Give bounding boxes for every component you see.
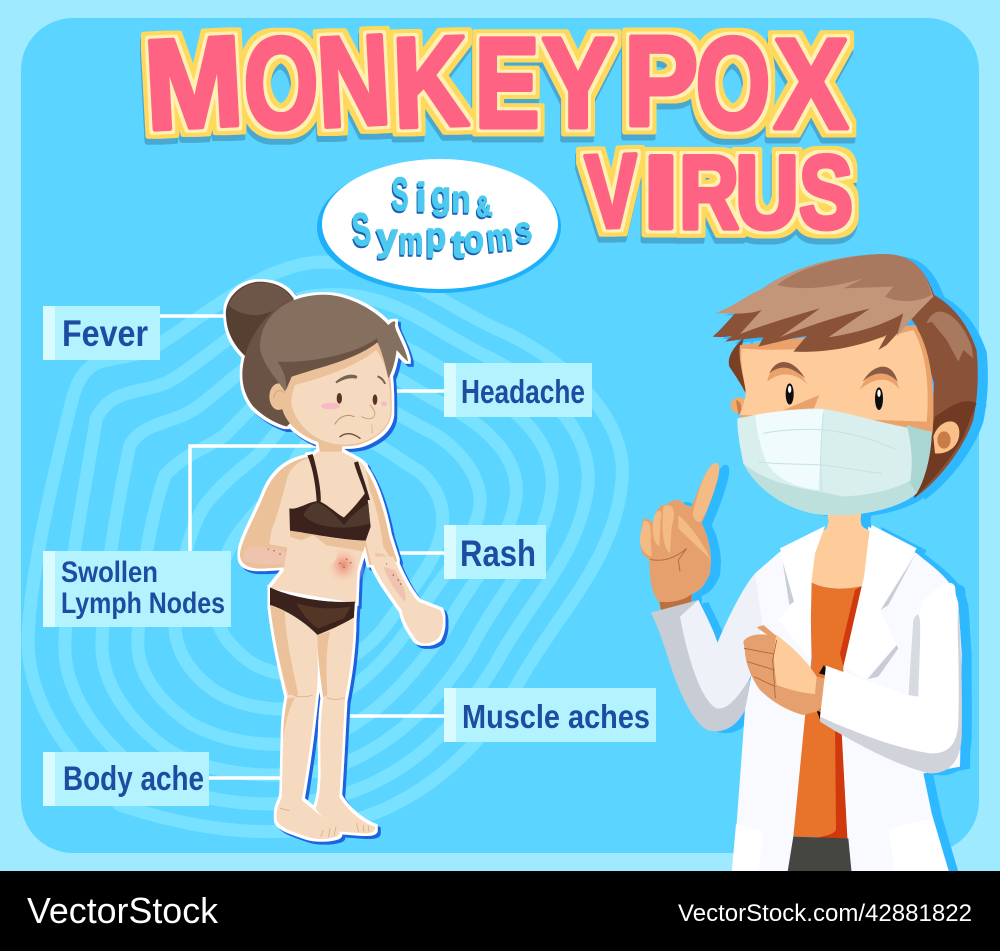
- back hair: [242, 297, 310, 427]
- badge oval: [317, 159, 561, 293]
- badge text: n: [451, 179, 471, 221]
- label: Fever: [43, 306, 160, 360]
- right arm: [359, 462, 397, 570]
- title: MONKEYPOX VIRUS: I: [643, 133, 679, 250]
- badge text: s: [512, 208, 534, 251]
- title: MONKEYPOX VIRUS: V: [584, 133, 640, 251]
- label: Swollen Lymph Nodes: Swollen: [61, 556, 158, 589]
- coat right front: [842, 527, 962, 873]
- label: Rash: Rash: [460, 533, 536, 574]
- badge text: m: [484, 215, 515, 260]
- title: MONKEYPOX VIRUS: [141, 9, 853, 251]
- label: Muscle aches: [444, 688, 656, 742]
- label: Swollen Lymph Nodes: Lymph Nodes: [61, 587, 225, 620]
- hair shade: [277, 338, 378, 390]
- nose line: [783, 395, 819, 410]
- trousers: [787, 837, 852, 873]
- left arm: [240, 456, 337, 569]
- title: MONKEYPOX VIRUS: R: [679, 134, 739, 250]
- badge: Sign & Symptoms: [317, 159, 561, 293]
- title: MONKEYPOX VIRUS: E: [475, 12, 539, 155]
- woman figure: [226, 282, 443, 839]
- badge text: &: [474, 190, 494, 224]
- footer bar: [0, 871, 1000, 951]
- label: Rash: [444, 525, 546, 579]
- watch: [817, 665, 830, 719]
- title: MONKEYPOX VIRUS: U: [735, 135, 799, 251]
- badge text: S: [350, 204, 373, 257]
- label: Fever: Fever: [62, 313, 148, 354]
- coat left front: [732, 552, 812, 873]
- title: MONKEYPOX VIRUS: X: [774, 13, 848, 156]
- badge text: g: [431, 175, 451, 217]
- nose and mouth: [335, 405, 375, 438]
- label: Headache: Headache: [461, 373, 585, 410]
- neck: [317, 433, 343, 453]
- ear: [269, 383, 288, 410]
- lab coat and shirt: [651, 517, 962, 873]
- orange shirt: [793, 582, 862, 838]
- title: MONKEYPOX VIRUS: S: [799, 134, 853, 250]
- coat pockets: [732, 818, 949, 873]
- right sleeve: [820, 583, 962, 773]
- top hair: [713, 254, 935, 352]
- front hand: [743, 625, 830, 715]
- forearm and hand: [370, 557, 443, 643]
- label: Body ache: [43, 752, 209, 806]
- badge text: o: [464, 219, 484, 261]
- title: MONKEYPOX VIRUS: N: [314, 9, 394, 155]
- rash on arm: [386, 563, 401, 585]
- face: [281, 342, 392, 446]
- footer logo text: VectorStock: [27, 890, 219, 931]
- right ear: [933, 421, 959, 454]
- chest: [810, 517, 869, 589]
- torso: [270, 452, 370, 603]
- title: MONKEYPOX VIRUS: O: [244, 11, 318, 156]
- eyes: [786, 383, 883, 410]
- fringe hair: [260, 295, 408, 392]
- badge text: [350, 168, 534, 266]
- right leg: [316, 617, 375, 837]
- neck: [817, 510, 868, 535]
- badge text: S: [392, 168, 408, 220]
- left lapel: [778, 526, 825, 660]
- title: MONKEYPOX VIRUS: K: [391, 9, 470, 155]
- eyebrows: [767, 362, 899, 389]
- title: MONKEYPOX VIRUS: P: [624, 10, 698, 153]
- badge text: t: [451, 224, 465, 266]
- badge text: p: [426, 215, 446, 257]
- eyebrows: [335, 375, 386, 384]
- eyes: [337, 393, 377, 405]
- left side hair: [729, 337, 747, 395]
- rash dots: [268, 549, 351, 568]
- hair back: [893, 293, 978, 498]
- label: Muscle aches: Muscle aches: [462, 698, 650, 735]
- title: MONKEYPOX VIRUS: Y: [542, 12, 614, 155]
- label: Body ache: Body ache: [63, 760, 204, 798]
- face: [740, 325, 934, 470]
- bra: [289, 454, 371, 541]
- blush: [321, 401, 387, 409]
- underwear: [270, 587, 355, 635]
- left leg: [270, 605, 340, 839]
- hair bun: [226, 282, 293, 356]
- title: MONKEYPOX VIRUS: O: [696, 11, 770, 156]
- footer image id: VectorStock.com/42881822: [678, 900, 972, 927]
- badge text: m: [399, 221, 423, 263]
- title: MONKEYPOX VIRUS: M: [141, 10, 246, 158]
- left ear: [731, 397, 747, 415]
- connector lines: [160, 316, 444, 778]
- raised sleeve: [651, 573, 762, 731]
- right lapel: [843, 525, 917, 679]
- badge text: i: [415, 176, 427, 220]
- face mask: [737, 408, 932, 515]
- badge text: y: [376, 217, 398, 259]
- doctor figure: [640, 254, 978, 873]
- raised hand: [640, 463, 719, 614]
- label: Headache: [444, 363, 592, 417]
- label: Swollen Lymph Nodes: [43, 551, 231, 627]
